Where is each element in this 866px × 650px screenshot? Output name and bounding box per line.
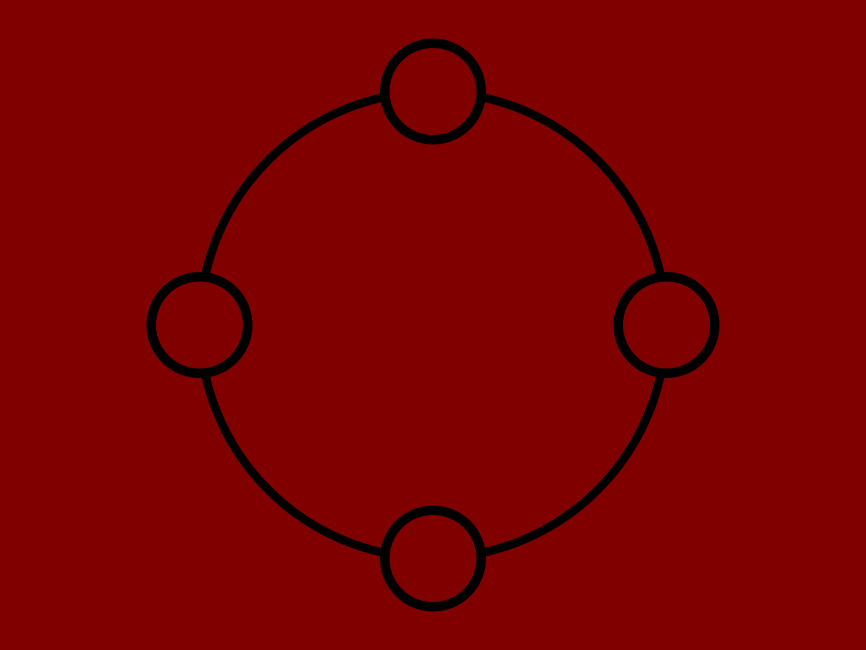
large ring bbox=[200, 92, 666, 558]
node: left bbox=[151, 277, 248, 373]
node: right bbox=[618, 277, 715, 373]
node: top bbox=[385, 43, 481, 140]
node: bottom bbox=[385, 510, 481, 607]
